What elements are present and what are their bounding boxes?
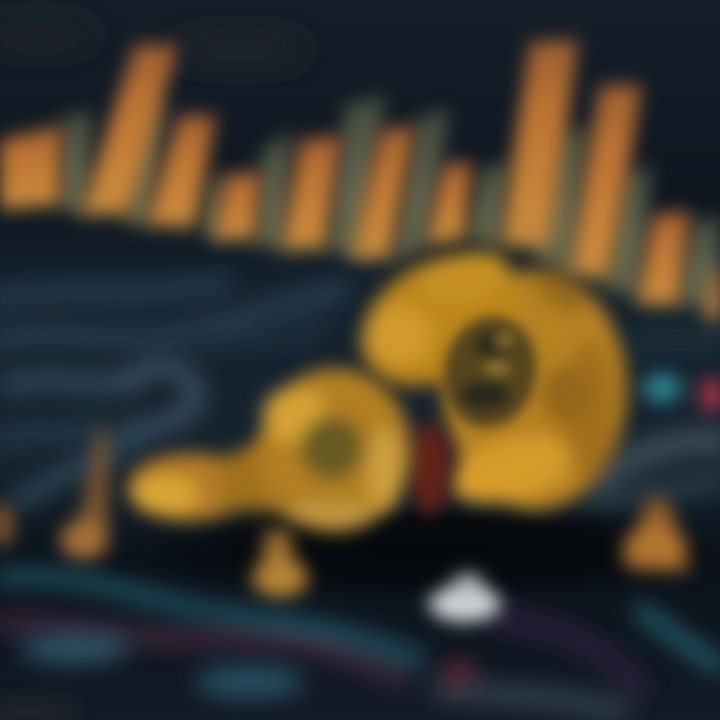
dark shadow under coins — [130, 500, 720, 600]
icon: bitcoin symbol on large coin — [433, 308, 547, 436]
icon: right candle — [622, 500, 690, 572]
bar chart: orange bars — [0, 40, 720, 322]
icon: teal and red chart markers — [642, 373, 720, 413]
icon: white cloud — [429, 573, 501, 622]
icon: small coin base — [252, 530, 308, 598]
icon: left coin tail — [128, 430, 290, 521]
water texture — [0, 285, 720, 500]
bar chart: grey-green bars — [60, 95, 720, 310]
icon: large rear coin — [337, 227, 627, 515]
icon: middle coin — [259, 368, 411, 532]
wave highlights — [0, 633, 476, 720]
icon: red-brown gap between coins — [410, 422, 450, 514]
coins group — [128, 227, 627, 598]
chart haze at top — [0, 23, 310, 62]
icon: left candle — [0, 430, 108, 560]
bottom waves — [0, 576, 720, 712]
